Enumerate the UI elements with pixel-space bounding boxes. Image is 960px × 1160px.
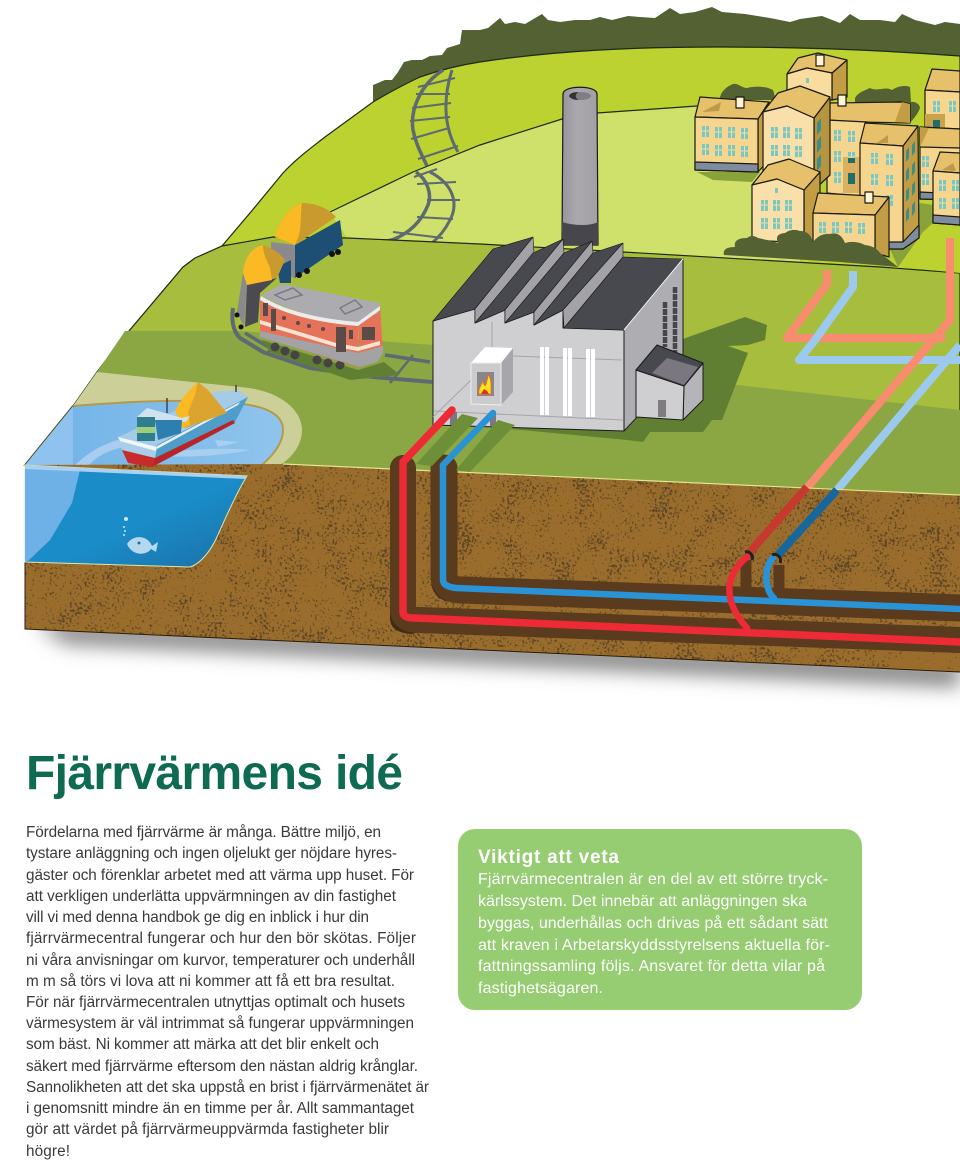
hedge in front of houses <box>724 230 898 267</box>
house behind tall <box>827 95 910 197</box>
body text: som bäst. Ni kommer att märka att det blir enkelt och <box>26 1036 379 1053</box>
hay wagon rear <box>271 203 343 278</box>
lower darker field band <box>73 331 960 495</box>
red pipe <box>403 410 960 642</box>
body text: Fördelarna med fjärrvärme är många. Bättre miljö, en <box>26 824 381 841</box>
house front right <box>933 152 960 225</box>
water edge <box>25 406 73 465</box>
body text: gäster och förenklar arbetet med att värma upp huset. För <box>26 867 414 884</box>
house bottom small <box>813 192 889 258</box>
blue branch <box>766 558 774 598</box>
body text: ni våra anvisningar om kurvor, temperaturer och underhåll <box>26 952 415 969</box>
house left wide <box>695 97 769 172</box>
callout text: kärlssystem. Det innebär att anläggningen ska <box>478 893 807 910</box>
ship hull side <box>150 397 248 466</box>
middle field <box>330 106 800 262</box>
callout heading: Viktigt att veta <box>478 847 619 868</box>
house tall front <box>860 123 919 249</box>
locomotive <box>260 284 400 380</box>
pipe wall notches <box>450 412 496 426</box>
factory building <box>433 237 703 431</box>
blue pipe <box>443 413 960 609</box>
chimney <box>562 87 598 245</box>
body text: i genomsnitt mindre än en timme per år. Allt sammantaget <box>26 1100 415 1117</box>
callout text <box>478 871 830 997</box>
left pale water corner <box>25 406 73 468</box>
house tall left <box>763 86 830 190</box>
pipe trenches on field <box>416 414 515 472</box>
body text: tystare anläggning och ingen oljelukt ger nöjdare hyres- <box>26 845 397 862</box>
red branch <box>729 557 747 628</box>
back railway track <box>343 70 460 253</box>
callout: Viktigt att veta <box>458 829 862 1010</box>
house bottom left <box>752 159 820 243</box>
callout text: byggas, underhållas och drivas på ett sådant sätt <box>478 914 829 932</box>
beach <box>73 372 302 474</box>
body text: vill vi med denna handbok ge dig en inblick i hur din <box>26 909 369 926</box>
right field patch behind houses <box>898 226 960 273</box>
soil block <box>25 460 960 675</box>
soil outline <box>25 465 960 672</box>
body text: För när fjärrvärmecentralen utnyttjas optimalt och husets <box>26 994 405 1011</box>
ship cabin <box>137 408 190 441</box>
body text: fjärrvärmecentral fungerar och hur den bör skötas. Följer <box>26 930 416 947</box>
callout text: fattningssamling följs. Ansvaret för detta vilar på <box>478 957 825 975</box>
lower track <box>232 308 432 383</box>
factory shadow <box>490 317 767 442</box>
underground branch pipes <box>749 487 837 556</box>
body text <box>26 824 429 1160</box>
locomotive side <box>260 298 358 367</box>
house shadows on lawn <box>697 172 933 267</box>
back field <box>222 47 960 290</box>
locomotive shadow <box>262 340 400 380</box>
title: Fjärrvärmens idé <box>26 747 403 800</box>
pipe joints <box>745 552 781 563</box>
locomotive wheels <box>270 342 344 370</box>
locomotive roof <box>261 284 380 322</box>
light patches on water <box>160 440 250 457</box>
annex shed <box>636 345 703 420</box>
body text: m m så törs vi lova att ni kommer att få ett bra resultat. <box>26 973 395 990</box>
front field <box>73 237 960 495</box>
forest background <box>373 7 960 103</box>
ground shadow <box>35 622 960 686</box>
ship hay cargo <box>175 382 227 428</box>
body text: att verkligen underlätta uppvärmningen av din fastighet <box>26 888 397 905</box>
middle field upper edge <box>330 106 697 212</box>
light sweep on water <box>73 440 125 470</box>
body text: gör att värdet på fjärrvärmeuppvärmda fastigheter blir <box>26 1121 389 1138</box>
boiler box <box>471 347 513 405</box>
factory side wall <box>624 259 683 431</box>
house top right <box>925 69 960 130</box>
callout text: att kraven i Arbetarskyddsstyrelsens aktuella för- <box>478 937 830 954</box>
ship deck <box>118 390 248 447</box>
houses <box>695 53 960 258</box>
fish <box>123 517 158 554</box>
ship stern <box>118 437 157 458</box>
water cross-section <box>25 465 247 567</box>
callout text: fastighetsägaren. <box>478 980 603 997</box>
factory saw-tooth roofs <box>433 237 683 330</box>
house mid right <box>920 127 960 200</box>
body text: Sannolikheten att det ska uppstå en brist i fjärrvärmenätet är <box>26 1079 429 1096</box>
trenches in soil <box>395 467 960 640</box>
factory windows <box>540 347 595 417</box>
body text: värmesystem är väl intrimmat så fungerar uppvärmningen <box>26 1015 414 1032</box>
house top back <box>787 53 847 100</box>
pipe lines on field, pale <box>787 238 960 490</box>
factory front wall <box>433 309 624 431</box>
bushes behind houses <box>720 84 920 123</box>
body text: säkert med fjärrvärme eftersom den nästan aldrig krånglar. <box>26 1058 418 1075</box>
water surface <box>25 401 283 475</box>
callout text: Fjärrvärmecentralen är en del av ett större tryck- <box>478 871 828 888</box>
body text: högre! <box>26 1143 70 1160</box>
hay wagon front <box>234 245 291 330</box>
ship <box>118 382 248 467</box>
factory side windows <box>665 287 675 352</box>
